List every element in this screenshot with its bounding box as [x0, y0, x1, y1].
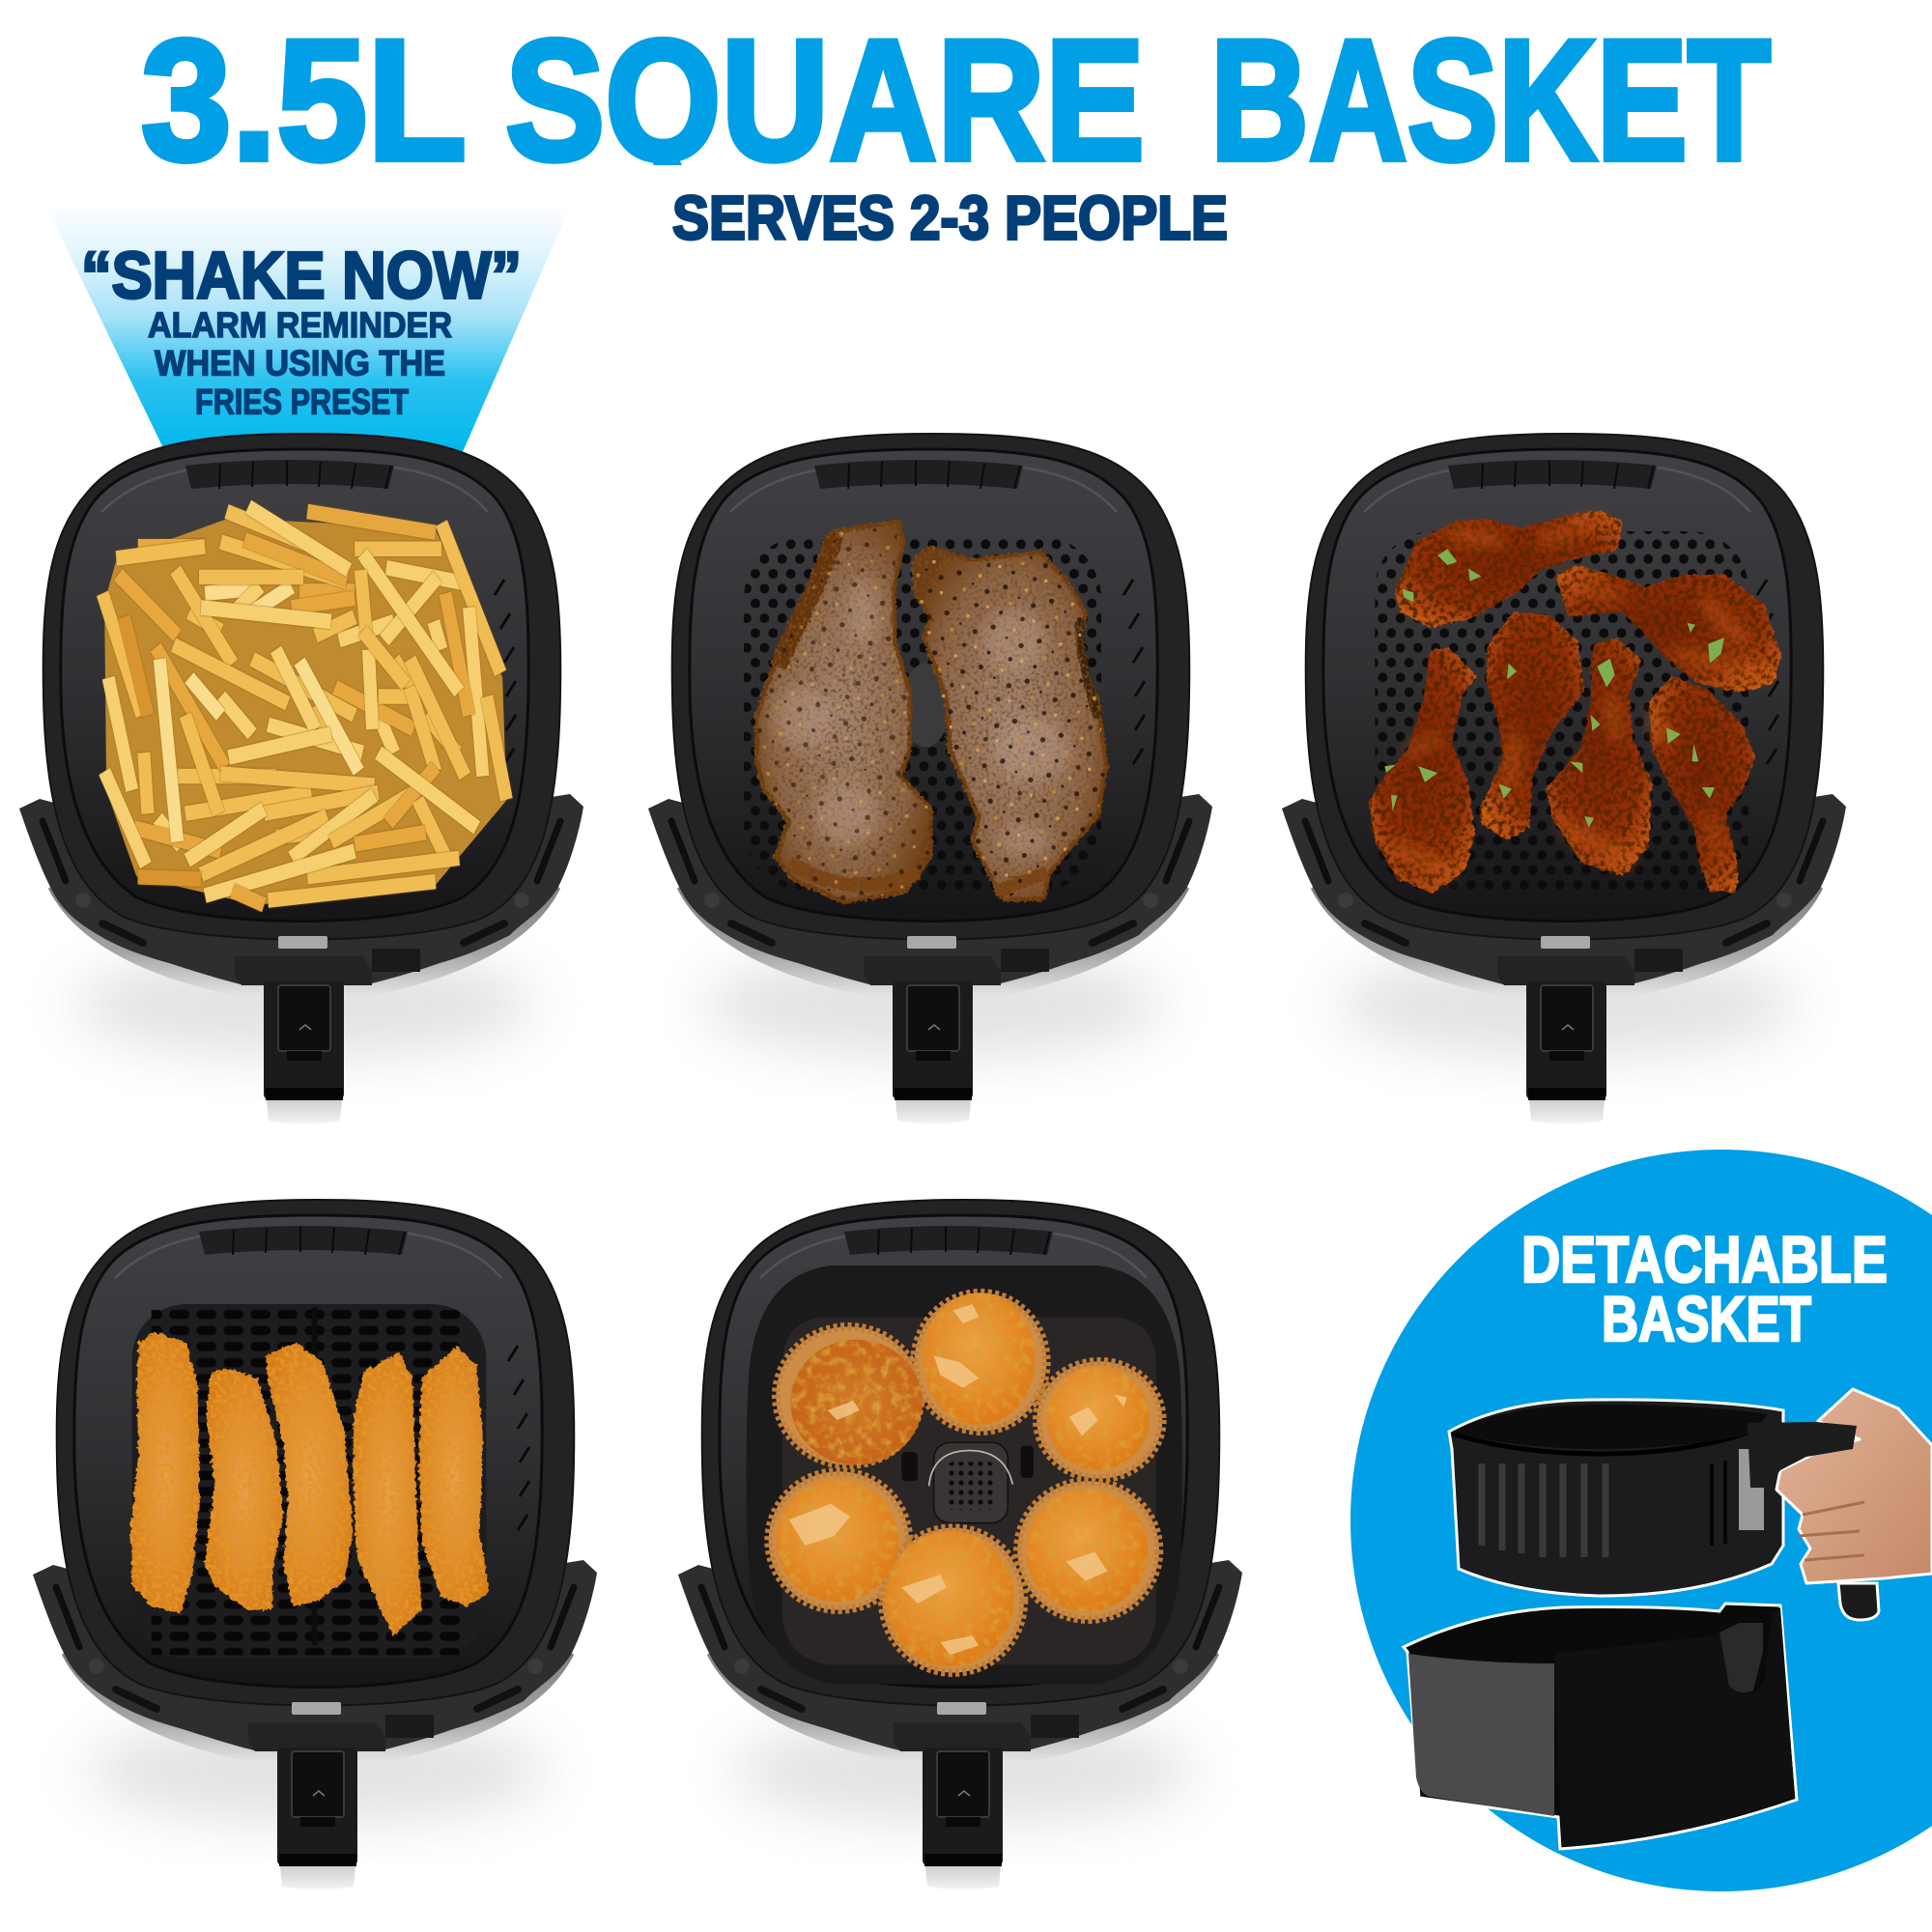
pepper and glaze	[756, 522, 1106, 901]
air fryer with chicken drumsticks	[1282, 434, 1846, 1123]
callout beam: shake now	[44, 203, 572, 454]
hand	[1776, 1389, 1932, 1583]
title: BASKET	[1210, 4, 1771, 196]
subtitle: SERVES 2-3 PEOPLE	[672, 184, 1228, 253]
callout beam: shake now: ALARM REMINDER	[148, 304, 452, 345]
title: SQUARE	[505, 4, 1145, 196]
basket floor	[132, 1304, 486, 1659]
air fryer with muffins	[678, 1200, 1242, 1889]
crisper tray	[782, 1317, 1156, 1664]
air fryer with steaks	[648, 434, 1212, 1123]
callout beam: shake now: WHEN USING THE	[155, 342, 445, 383]
heading: detachable basket	[1521, 1223, 1888, 1354]
chicken drumsticks	[1369, 510, 1780, 894]
basket handle grip	[1747, 1422, 1857, 1488]
callout beam: shake now: FRIES PRESET	[195, 381, 409, 421]
blue circle: detachable basket	[1350, 1150, 1932, 1891]
glaze highlights	[1398, 522, 1761, 872]
title	[141, 37, 1772, 165]
air fryer with breaded chicken tenders	[33, 1200, 597, 1889]
title: 3.5L	[141, 4, 467, 196]
chicken tenders	[130, 1304, 490, 1659]
basket holes	[744, 534, 1101, 892]
parsley	[1384, 549, 1724, 828]
interior wall	[746, 1265, 1182, 1684]
basket holes	[1375, 531, 1748, 892]
muffin crumbs	[789, 1304, 1127, 1655]
detached outer drawer	[1404, 1604, 1797, 1849]
bottom of handle	[1838, 1583, 1879, 1620]
heading: detachable basket: BASKET	[1602, 1283, 1811, 1354]
steaks	[744, 522, 1106, 901]
callout beam: shake now: “SHAKE NOW”	[81, 238, 522, 313]
fries	[102, 507, 506, 905]
detached inner basket	[1449, 1400, 1879, 1620]
air fryer with fries	[19, 434, 583, 1123]
muffins	[746, 1265, 1182, 1684]
